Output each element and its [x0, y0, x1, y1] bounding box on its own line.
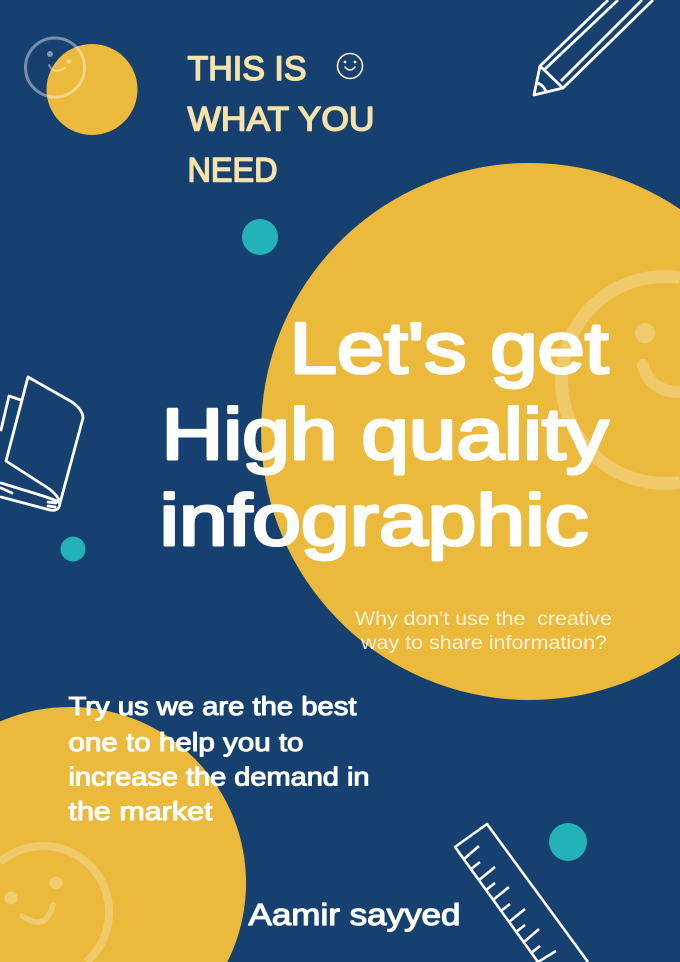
body text: Try us we are the best	[68, 691, 357, 721]
top heading	[188, 50, 374, 190]
teal dot: lower right	[549, 823, 587, 861]
body text: one to help you to	[68, 727, 304, 757]
large yellow circle with smiley	[261, 163, 680, 700]
icon: pencil	[534, 0, 653, 95]
icon: small smiley	[338, 54, 362, 78]
bottom-left yellow circle with smiley	[0, 707, 246, 962]
body text: increase the demand in	[68, 762, 370, 792]
body text: the market	[68, 796, 213, 826]
subtitle text: way to share information?	[360, 632, 607, 654]
top heading: NEED	[188, 152, 278, 190]
main title: infographic	[160, 481, 588, 561]
teal dot: upper	[242, 219, 278, 255]
subtitle text	[355, 608, 612, 654]
top heading: WHAT YOU	[188, 100, 374, 138]
author name: Aamir sayyed	[248, 897, 460, 932]
icon: ruler	[455, 824, 588, 962]
top heading: THIS IS	[188, 50, 306, 88]
main title: Let's get	[290, 309, 608, 389]
top-left yellow circle with smiley	[26, 38, 138, 135]
body text	[68, 691, 370, 826]
icon: book	[1, 377, 83, 510]
subtitle text: Why don't use the creative	[355, 608, 612, 630]
main title	[160, 309, 608, 561]
teal dot: left	[60, 536, 86, 562]
main title: High quality	[162, 395, 608, 475]
